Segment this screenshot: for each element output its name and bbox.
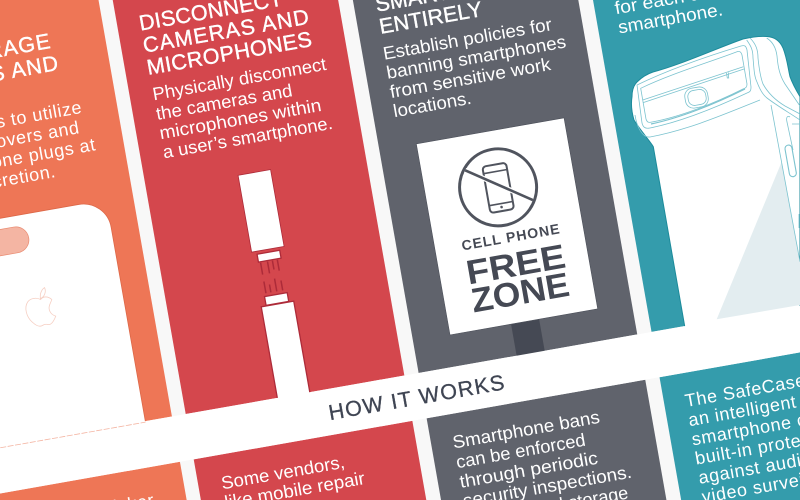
icon: phone back (0, 200, 153, 500)
heading band (0, 225, 800, 500)
text: disconnect body: Physically disconnect (151, 54, 328, 104)
sign: cell phone free zone (416, 118, 598, 335)
icon: sign pole (511, 317, 545, 358)
panel: encourage covers and plugs (0, 0, 180, 500)
text: safecase upper body: smartphone. (616, 0, 724, 37)
text: lower teal body: an intelligent (687, 391, 798, 430)
heading: disconnect: MICROPHONES (145, 27, 314, 80)
panel: ban smartphones entirely (325, 0, 638, 375)
heading: disconnect: CAMERAS AND (141, 5, 311, 58)
text: ban body: locations. (392, 88, 473, 121)
text: ban body: from sensitive work (388, 54, 553, 102)
panel: lower gray (427, 380, 673, 500)
text: ban body: banning smartphones (385, 32, 568, 83)
icon: safecase phone case (631, 36, 800, 340)
text: disconnect body: a user’s smartphone. (161, 113, 334, 162)
text: lower gray body: Smartphone bans (451, 407, 601, 452)
phone bottom dashed edge (0, 422, 146, 473)
icon: disconnected connector (238, 170, 311, 405)
text: lower gray body: through periodic (458, 448, 599, 492)
text: cell phone: CELL PHONE (460, 220, 561, 253)
icon: no phone (454, 143, 543, 232)
shape: light triangle (717, 162, 800, 319)
text: disconnect body: the cameras and (154, 80, 294, 124)
panel: disconnect cameras and microphones (92, 0, 406, 421)
text: encourage body (0, 96, 101, 213)
text: lower teal body (683, 359, 800, 500)
heading: encourage covers and plugs (0, 28, 65, 124)
text: lower gray body (451, 403, 637, 500)
text: ban body: Establish policies for (381, 14, 553, 64)
text: disconnect body: microphones within (158, 95, 323, 143)
text: lower gray body: can be enforced (454, 430, 587, 472)
text: lower red body: Some vendors, (220, 452, 346, 493)
panel: safecase teal (558, 0, 800, 332)
panel: lower orange (0, 462, 208, 500)
text: disconnect body (151, 54, 338, 162)
icon: apple logo (23, 287, 57, 328)
text: lower red body (220, 449, 366, 500)
text: ban body (381, 12, 574, 121)
text: zone: ZONE (468, 266, 572, 320)
heading: ban smartphones (370, 0, 545, 39)
icon: camera pill (0, 225, 31, 262)
heading: disconnect (137, 0, 315, 80)
panel: lower teal (660, 290, 800, 500)
text: free: FREE (463, 238, 568, 292)
heading: how it works: HOW IT WORKS (327, 370, 506, 425)
panel: lower red (194, 421, 440, 500)
case contour lines (635, 38, 800, 262)
